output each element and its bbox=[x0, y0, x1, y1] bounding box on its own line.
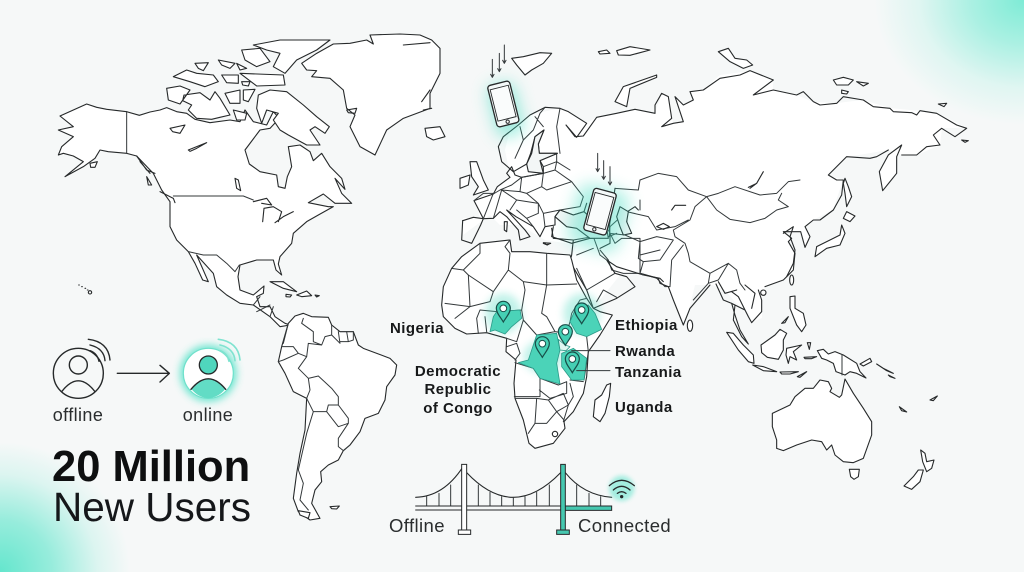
icon: offline user bbox=[53, 339, 110, 398]
pin: Uganda bbox=[558, 325, 572, 345]
pin: DRC bbox=[535, 337, 549, 357]
pin: Ethiopia bbox=[575, 303, 589, 324]
label: Connected: Connected bbox=[578, 515, 671, 536]
map: Greenland and Iceland bbox=[302, 34, 445, 155]
map: Europe bbox=[460, 47, 657, 245]
highlighted countries bbox=[490, 305, 602, 384]
label: Democratic Republic of Congo: Democratic bbox=[415, 363, 501, 380]
map: North Asia coast bbox=[640, 48, 968, 331]
map: Africa bbox=[442, 240, 612, 448]
map: Central and East Asia borders bbox=[600, 172, 800, 300]
label: online: online bbox=[183, 405, 233, 425]
label: Nigeria: Nigeria bbox=[390, 320, 444, 337]
icon: wifi bbox=[609, 476, 634, 501]
map: Southeast Asia and Oceania bbox=[716, 282, 937, 489]
bridge graphic bbox=[416, 464, 634, 534]
label: Democratic Republic of Congo: of Congo bbox=[423, 400, 493, 417]
phone: Scandinavia bbox=[485, 45, 526, 139]
country labels bbox=[390, 317, 682, 417]
arrow bbox=[117, 365, 169, 382]
map: South America bbox=[278, 313, 397, 520]
label: Offline: Offline bbox=[389, 515, 445, 536]
map highlight glow: Africa bbox=[485, 293, 600, 373]
map: Arabia and water bodies bbox=[543, 228, 663, 308]
phone: Eastern Europe bbox=[564, 153, 632, 256]
headline: 20 Million: 20 Million bbox=[52, 443, 250, 491]
label: Democratic Republic of Congo: Republic bbox=[425, 381, 491, 398]
label: Rwanda: Rwanda bbox=[615, 343, 675, 360]
pin: Tanzania bbox=[565, 352, 579, 373]
label: Uganda: Uganda bbox=[615, 399, 673, 416]
label: offline: offline bbox=[53, 405, 103, 425]
world map bbox=[58, 34, 968, 520]
icon: online user bbox=[180, 339, 240, 402]
pin: Nigeria bbox=[496, 301, 510, 322]
label: Ethiopia: Ethiopia bbox=[615, 317, 678, 334]
map: water patches bbox=[527, 130, 632, 238]
subheadline: New Users: New Users bbox=[53, 484, 251, 530]
label: Tanzania: Tanzania bbox=[615, 364, 682, 381]
leader lines bbox=[572, 351, 610, 371]
map: North America bbox=[58, 34, 445, 327]
pins bbox=[496, 301, 589, 373]
map: Eurasia landmass fill bbox=[463, 71, 967, 325]
offline to online icons bbox=[53, 339, 240, 402]
